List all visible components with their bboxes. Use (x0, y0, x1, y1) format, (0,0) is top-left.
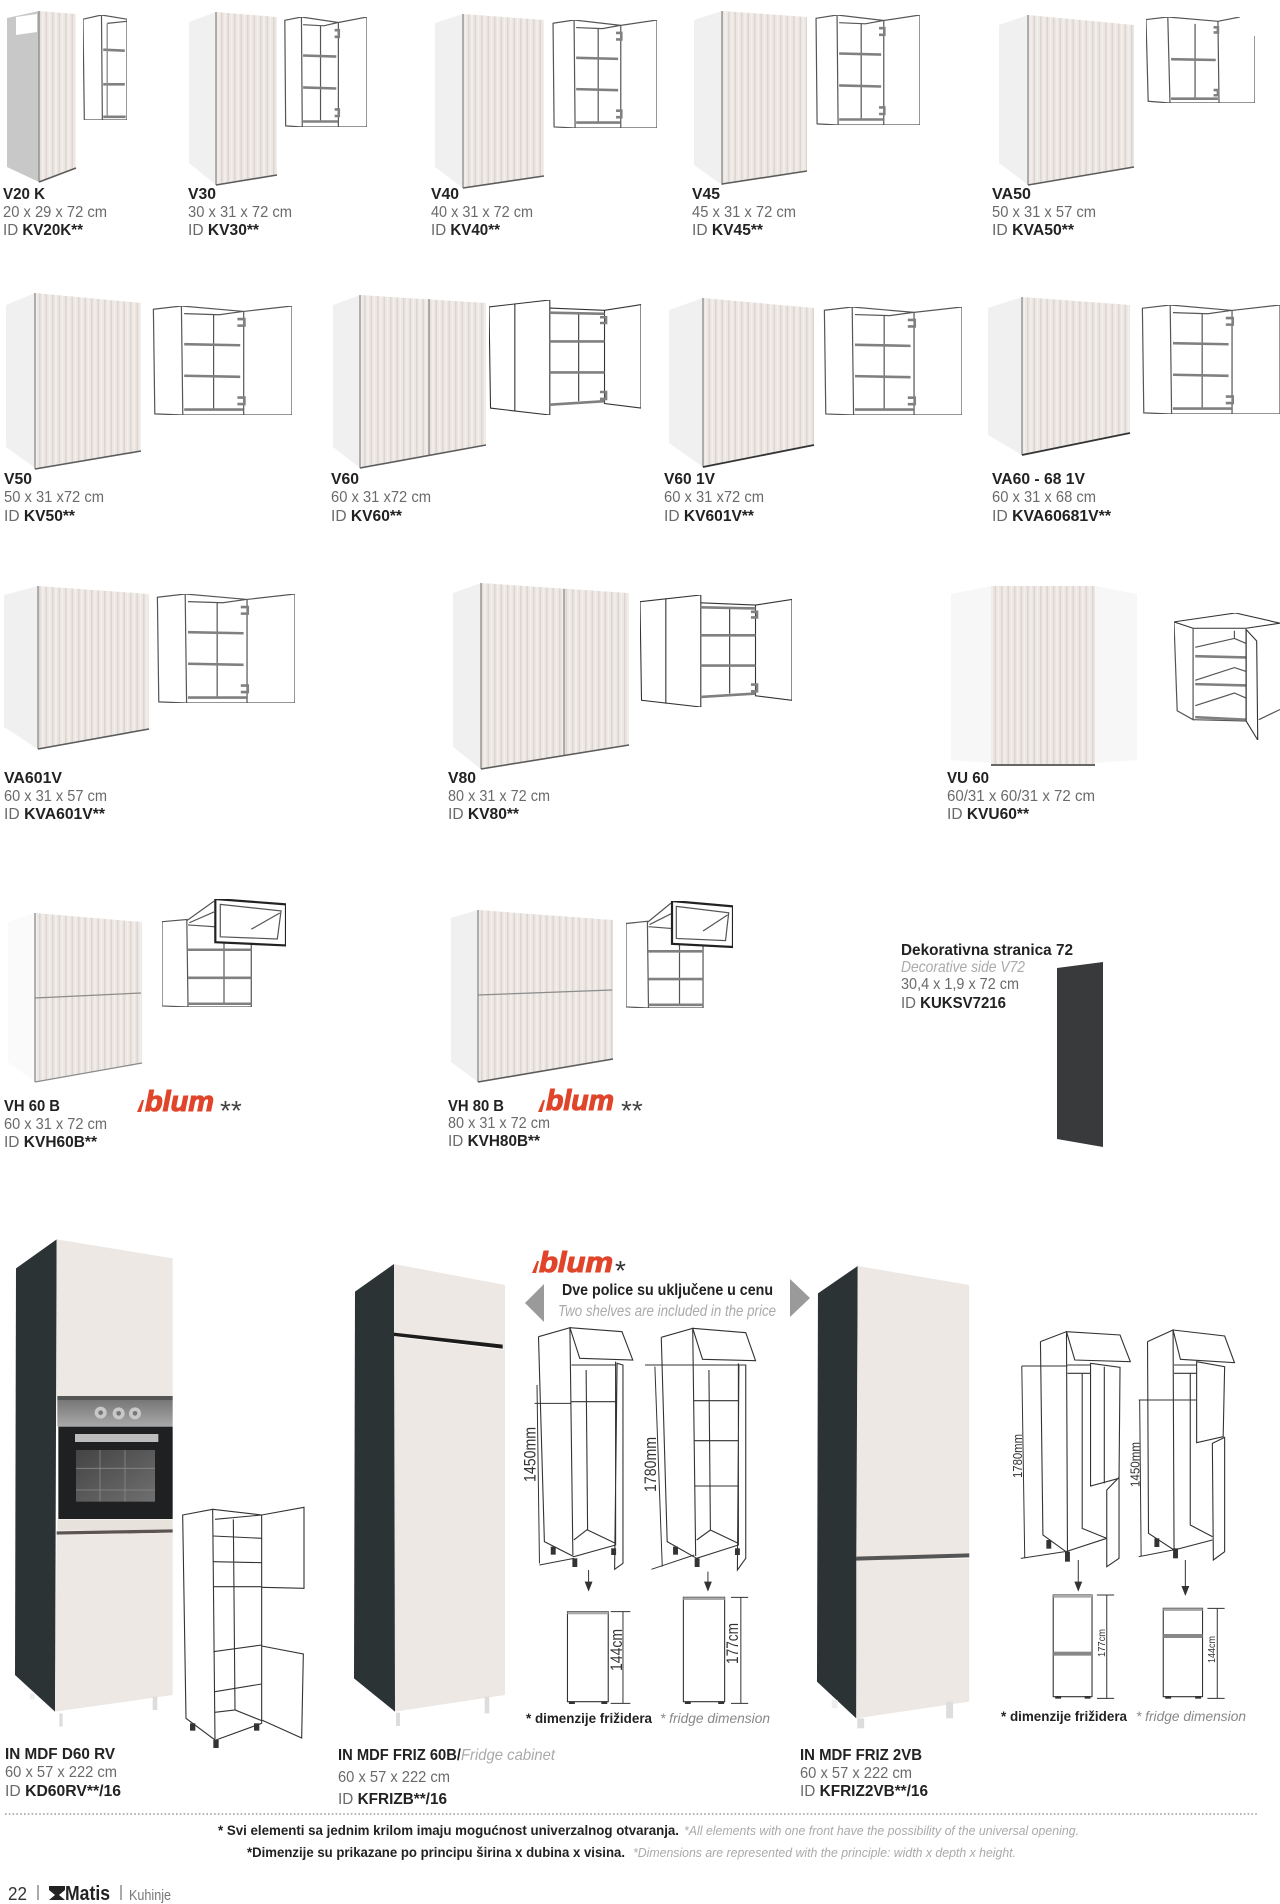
logo: blum with asterisk (532, 1247, 626, 1286)
product: V20 K (3, 11, 127, 239)
label: VH 60 B (4, 1098, 107, 1151)
panel: dark side board (1057, 962, 1103, 1147)
line drawing: V60 1V (824, 307, 962, 415)
label: V30 (188, 186, 292, 239)
label: V60: 60 x 31 x72 cm (331, 489, 431, 506)
cabinet photo: VA60 - 68 1V (988, 297, 1130, 455)
label: IN MDF FRIZ 60B: Fridge cabinet (461, 1747, 556, 1764)
product: V80 (448, 583, 792, 823)
cabinet photo: V30 (189, 12, 277, 185)
label: IN MDF FRIZ 60B (338, 1747, 556, 1808)
line drawing: VH 60 B (162, 899, 286, 1007)
product: IN MDF FRIZ 2VB (800, 1266, 969, 1800)
line drawings: fridge cabinet 60B with dimensions (520, 1328, 756, 1704)
line drawing: V80 (640, 595, 792, 707)
label: VA60 - 68 1V (992, 471, 1112, 525)
label: V60 (331, 471, 431, 525)
label: VA50: VA50 (992, 186, 1031, 203)
cabinet photo: VA50 (999, 15, 1134, 185)
label: V60: ID KV60** (331, 508, 403, 525)
cabinet photo: V60 (333, 295, 486, 468)
cabinet photo: V60 1V (669, 298, 814, 467)
cabinet photo: V40 (435, 14, 544, 188)
label: VH 60 B: ID KVH60B** (4, 1134, 98, 1151)
cabinet photo: fridge cabinet 60B (354, 1264, 505, 1726)
footnote: universal opening: * Svi elementi sa jednim krilom imaju mogućnost univerzalnog otvaranja. (218, 1822, 679, 1838)
label: decorative side: 30,4 x 1,9 x 72 cm (901, 976, 1019, 993)
dimension: 1450mm: 1450mm (520, 1427, 540, 1482)
footnote: dimension principle: *Dimenzije su prikazane po principu širina x dubina x visina. (247, 1844, 625, 1860)
label: V60 1V: V60 1V (664, 471, 715, 488)
text: shelves included: Two shelves are included in the price (558, 1303, 776, 1320)
line drawing: V40 (553, 20, 657, 128)
cabinet photo: V80 (453, 583, 629, 769)
product: VU 60 (947, 586, 1280, 823)
label: IN MDF FRIZ 2VB (800, 1747, 928, 1800)
line drawing: VH 80 B (626, 901, 733, 1008)
text: shelves included: Dve police su uključene u cenu (562, 1282, 773, 1299)
label: V40 (431, 186, 533, 239)
label: VA60 - 68 1V: ID KVA60681V** (992, 508, 1112, 525)
label: IN MDF FRIZ 2VB: 60 x 57 x 222 cm (800, 1765, 912, 1782)
line drawing: VU 60 (1174, 613, 1280, 740)
dimension: 144cm: 144cm (1207, 1636, 1218, 1663)
label: IN MDF FRIZ 60B: IN MDF FRIZ 60B/ (338, 1747, 462, 1764)
product: V60 1V (664, 298, 962, 525)
label: IN MDF D60 RV (5, 1746, 121, 1800)
label: VH 80 B (448, 1098, 550, 1150)
footnote: universal opening: *All elements with one front have the possibility of the universal opening. (684, 1823, 1079, 1838)
line drawing: VA60 - 68 1V (1142, 305, 1280, 414)
footnote: dimension principle: *Dimensions are represented with the principle: width x depth x height. (633, 1845, 1016, 1860)
label: V40: ID KV40** (431, 222, 501, 239)
label: VA60 - 68 1V: 60 x 31 x 68 cm (992, 489, 1096, 506)
label: VA50: 50 x 31 x 57 cm (992, 204, 1096, 221)
label: VH 60 B: 60 x 31 x 72 cm (4, 1116, 107, 1133)
label: V30: ID KV30** (188, 222, 260, 239)
dimension: 144cm: 144cm (607, 1629, 626, 1671)
footer: page number and brand: 22 (8, 1884, 27, 1904)
label: V60 1V: ID KV601V** (664, 508, 755, 525)
label: V20 K (3, 186, 107, 239)
dimension: 177cm: 177cm (723, 1623, 742, 1664)
note: double asterisk: ** (621, 1095, 643, 1126)
note: double asterisk: ** (220, 1095, 242, 1126)
dimension: 177cm: 177cm (1097, 1629, 1108, 1657)
logo: blum with asterisk: * (615, 1255, 626, 1286)
label: V45: 45 x 31 x 72 cm (692, 204, 796, 221)
label: decorative side: ID KUKSV7216 (901, 995, 1006, 1012)
cabinet photo: VH 60 B (8, 913, 142, 1082)
footnote: dimension principle (247, 1844, 1016, 1860)
logo: blum: blum (145, 1086, 214, 1118)
label: V80: ID KV80** (448, 806, 520, 823)
label: V50: ID KV50** (4, 508, 76, 525)
label: VA601V: VA601V (4, 770, 62, 787)
label: VU 60: ID KVU60** (947, 806, 1030, 823)
line drawings: fridge cabinet 2VB with dimensions (1010, 1330, 1234, 1699)
label: VA601V: 60 x 31 x 57 cm (4, 788, 107, 805)
cabinet photo: VA601V (4, 586, 149, 749)
cabinet photo: fridge cabinet 2VB (817, 1266, 969, 1728)
cabinet photo: V50 (6, 293, 141, 469)
product: V45 (692, 11, 920, 239)
label: V40: 40 x 31 x 72 cm (431, 204, 533, 221)
product: VH 60 B (4, 899, 286, 1151)
label: IN MDF D60 RV: ID KD60RV**/16 (5, 1783, 121, 1800)
note: fridge dimension left: * fridge dimension (660, 1710, 770, 1726)
label: V80: 80 x 31 x 72 cm (448, 788, 550, 805)
product: VA50 (992, 15, 1255, 239)
label: VA60 - 68 1V: VA60 - 68 1V (992, 471, 1085, 488)
product: V60 (331, 295, 641, 525)
label: decorative side: Decorative side V72 (901, 959, 1025, 976)
note: fridge dimension right (1001, 1708, 1246, 1724)
label: decorative side (901, 942, 1073, 1012)
label: VH 80 B: 80 x 31 x 72 cm (448, 1115, 550, 1132)
label: decorative side: Dekorativna stranica 72 (901, 942, 1073, 959)
label: V30: V30 (188, 186, 216, 203)
label: IN MDF FRIZ 2VB: ID KFRIZ2VB**/16 (800, 1783, 928, 1800)
label: VU 60 (947, 770, 1095, 823)
dimension: 1780mm: 1780mm (641, 1437, 660, 1492)
line drawing: V60 (489, 300, 641, 415)
dimension: 1780mm: 1780mm (1010, 1434, 1025, 1478)
line drawing: V50 (153, 306, 292, 415)
label: V20 K: ID KV20K** (3, 222, 84, 239)
product: IN MDF D60 RV (5, 1239, 304, 1800)
note: fridge dimension right: * fridge dimension (1136, 1708, 1246, 1724)
label: VU 60: VU 60 (947, 770, 989, 787)
label: IN MDF D60 RV: IN MDF D60 RV (5, 1746, 115, 1763)
arrow: left triangle (525, 1284, 544, 1322)
note: fridge dimension left: * dimenzije frižidera (526, 1710, 652, 1726)
label: V45: V45 (692, 186, 720, 203)
line drawing: V30 (285, 17, 367, 127)
footer: page number and brand (8, 1883, 171, 1904)
label: VA601V: ID KVA601V** (4, 806, 106, 823)
cabinet photo: V20 K (7, 11, 76, 182)
label: V45 (692, 186, 796, 239)
product: VH 80 B (448, 901, 733, 1150)
note: fridge dimension right: * dimenzije frižidera (1001, 1708, 1127, 1724)
label: VU 60: 60/31 x 60/31 x 72 cm (947, 788, 1095, 805)
product: V30 (188, 12, 367, 239)
label: V20 K: V20 K (3, 186, 45, 203)
label: V40: V40 (431, 186, 459, 203)
product: V50 (4, 293, 292, 525)
footer: page number and brand: Kuhinje (129, 1887, 171, 1904)
note: fridge dimension left (526, 1710, 770, 1726)
label: V80: V80 (448, 770, 476, 787)
label: VH 80 B: ID KVH80B** (448, 1133, 541, 1150)
line drawing: V20 K (83, 15, 127, 120)
label: V45: ID KV45** (692, 222, 764, 239)
logo: blum with asterisk: blum (539, 1247, 613, 1279)
product: VA601V (4, 586, 295, 823)
label: VH 80 B: VH 80 B (448, 1098, 504, 1115)
label: V30: 30 x 31 x 72 cm (188, 204, 292, 221)
label: V60 1V: 60 x 31 x72 cm (664, 489, 764, 506)
label: IN MDF FRIZ 60B: 60 x 57 x 222 cm (338, 1769, 450, 1786)
arrow: right triangle (790, 1279, 810, 1317)
label: VA601V (4, 770, 107, 823)
label: V50: 50 x 31 x72 cm (4, 489, 104, 506)
label: V60 1V (664, 471, 764, 525)
line drawing: VA50 (1146, 17, 1255, 103)
product: V40 (431, 14, 657, 239)
footnote: universal opening (218, 1822, 1079, 1838)
label: VH 60 B: VH 60 B (4, 1098, 60, 1115)
product: IN MDF FRIZ 60B (338, 1264, 556, 1808)
cabinet photo: VU 60 (951, 586, 1137, 765)
product: decorative side (901, 942, 1103, 1147)
label: IN MDF FRIZ 60B: ID KFRIZB**/16 (338, 1791, 447, 1808)
line drawing: VA601V (157, 594, 295, 703)
product: VA60 - 68 1V (988, 297, 1280, 525)
label: V60: V60 (331, 471, 359, 488)
cabinet photo: oven cabinet (15, 1239, 173, 1727)
text: shelves included (558, 1282, 776, 1320)
label: IN MDF FRIZ 2VB: IN MDF FRIZ 2VB (800, 1747, 922, 1764)
label: VA50: ID KVA50** (992, 222, 1075, 239)
label: IN MDF D60 RV: 60 x 57 x 222 cm (5, 1764, 117, 1781)
line drawing: oven cabinet (183, 1507, 304, 1748)
label: V50: V50 (4, 471, 32, 488)
cabinet photo: V45 (694, 11, 807, 185)
line drawing: V45 (816, 15, 920, 125)
dimension: 1450mm: 1450mm (1128, 1442, 1143, 1487)
label: V50 (4, 471, 104, 525)
label: VA50 (992, 186, 1096, 239)
logo: blum: blum (546, 1085, 614, 1117)
cabinet photo: VH 80 B (451, 910, 613, 1082)
label: V80 (448, 770, 550, 823)
label: V20 K: 20 x 29 x 72 cm (3, 204, 107, 221)
